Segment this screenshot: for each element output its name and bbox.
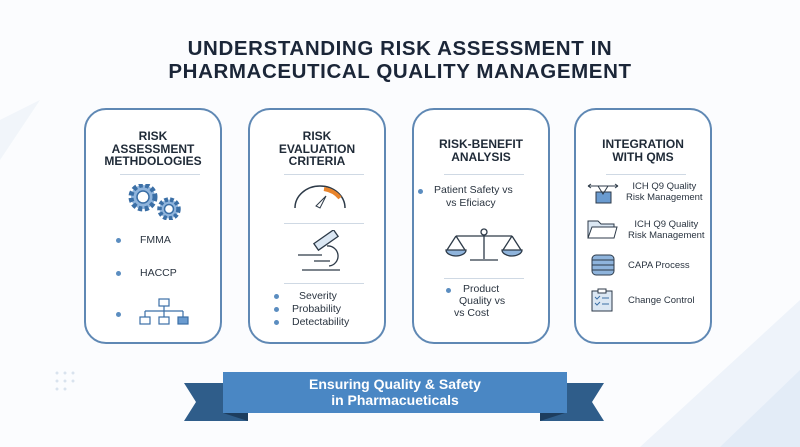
product quality: vs Cost bbox=[454, 307, 489, 319]
heading: WITH QMS bbox=[612, 150, 674, 164]
HACCP bbox=[116, 271, 121, 276]
product quality: Product bbox=[463, 283, 499, 295]
icon: gauge bbox=[294, 185, 346, 209]
item: ICH Q9 1: Risk Management bbox=[626, 192, 703, 202]
banner text: in Pharmacueticals bbox=[331, 392, 459, 408]
icon: org chart bbox=[116, 312, 121, 317]
title bbox=[168, 37, 632, 83]
heading: ANALYSIS bbox=[451, 150, 511, 164]
patient safety: vs Eficiacy bbox=[446, 197, 496, 209]
title: PHARMACEUTICAL QUALITY MANAGEMENT bbox=[168, 60, 632, 83]
product quality bbox=[446, 283, 505, 319]
icon: microscope bbox=[298, 230, 340, 271]
heading: RISK bbox=[139, 129, 167, 143]
heading bbox=[439, 137, 523, 164]
criteria list: Detectability bbox=[292, 316, 349, 328]
banner ribbon bbox=[184, 372, 604, 421]
item: change control: Change Control bbox=[628, 295, 695, 306]
item: CAPA bbox=[592, 254, 690, 276]
heading: EVALUATION bbox=[279, 142, 355, 156]
icon: scales bbox=[445, 228, 523, 261]
heading: RISK bbox=[303, 129, 331, 143]
criteria list: Probability bbox=[292, 303, 341, 315]
dot grid decoration bbox=[56, 372, 74, 390]
item: ICH Q9 2: Risk Management bbox=[628, 230, 705, 240]
banner text bbox=[309, 376, 481, 408]
banner text: Ensuring Quality & Safety bbox=[309, 376, 481, 392]
item: change control bbox=[592, 288, 695, 312]
panel: risk-benefit bbox=[412, 108, 550, 344]
icon: gears bbox=[128, 184, 181, 220]
panel: integration QMS bbox=[574, 108, 712, 344]
heading bbox=[104, 129, 202, 168]
FMMA bbox=[116, 238, 121, 243]
title: UNDERSTANDING RISK ASSESSMENT IN bbox=[188, 37, 612, 60]
product quality: Quality vs bbox=[459, 295, 505, 307]
item: ICH Q9 1: ICH Q9 Quality bbox=[632, 181, 696, 192]
item: CAPA: CAPA Process bbox=[628, 260, 690, 271]
panel: methodologies: FMMA bbox=[140, 234, 171, 246]
heading: CRITERIA bbox=[289, 154, 345, 168]
panel: methodologies bbox=[84, 108, 222, 344]
item: ICH Q9 2 bbox=[587, 219, 705, 240]
heading: RISK-BENEFIT bbox=[439, 137, 523, 151]
panel: evaluation criteria bbox=[248, 108, 386, 344]
item: ICH Q9 1 bbox=[588, 181, 703, 204]
item: ICH Q9 2: ICH Q9 Quality bbox=[634, 219, 698, 230]
patient safety bbox=[418, 184, 513, 209]
heading: ASSESSMENT bbox=[112, 142, 194, 156]
heading: INTEGRATION bbox=[602, 137, 684, 151]
patient safety: Patient Safety vs bbox=[434, 184, 513, 196]
criteria list: Severity bbox=[299, 290, 337, 302]
criteria list bbox=[274, 290, 350, 328]
heading bbox=[279, 129, 355, 168]
heading: METHDOLOGIES bbox=[104, 154, 202, 168]
heading bbox=[602, 137, 684, 164]
panel: methodologies: HACCP bbox=[140, 267, 177, 279]
